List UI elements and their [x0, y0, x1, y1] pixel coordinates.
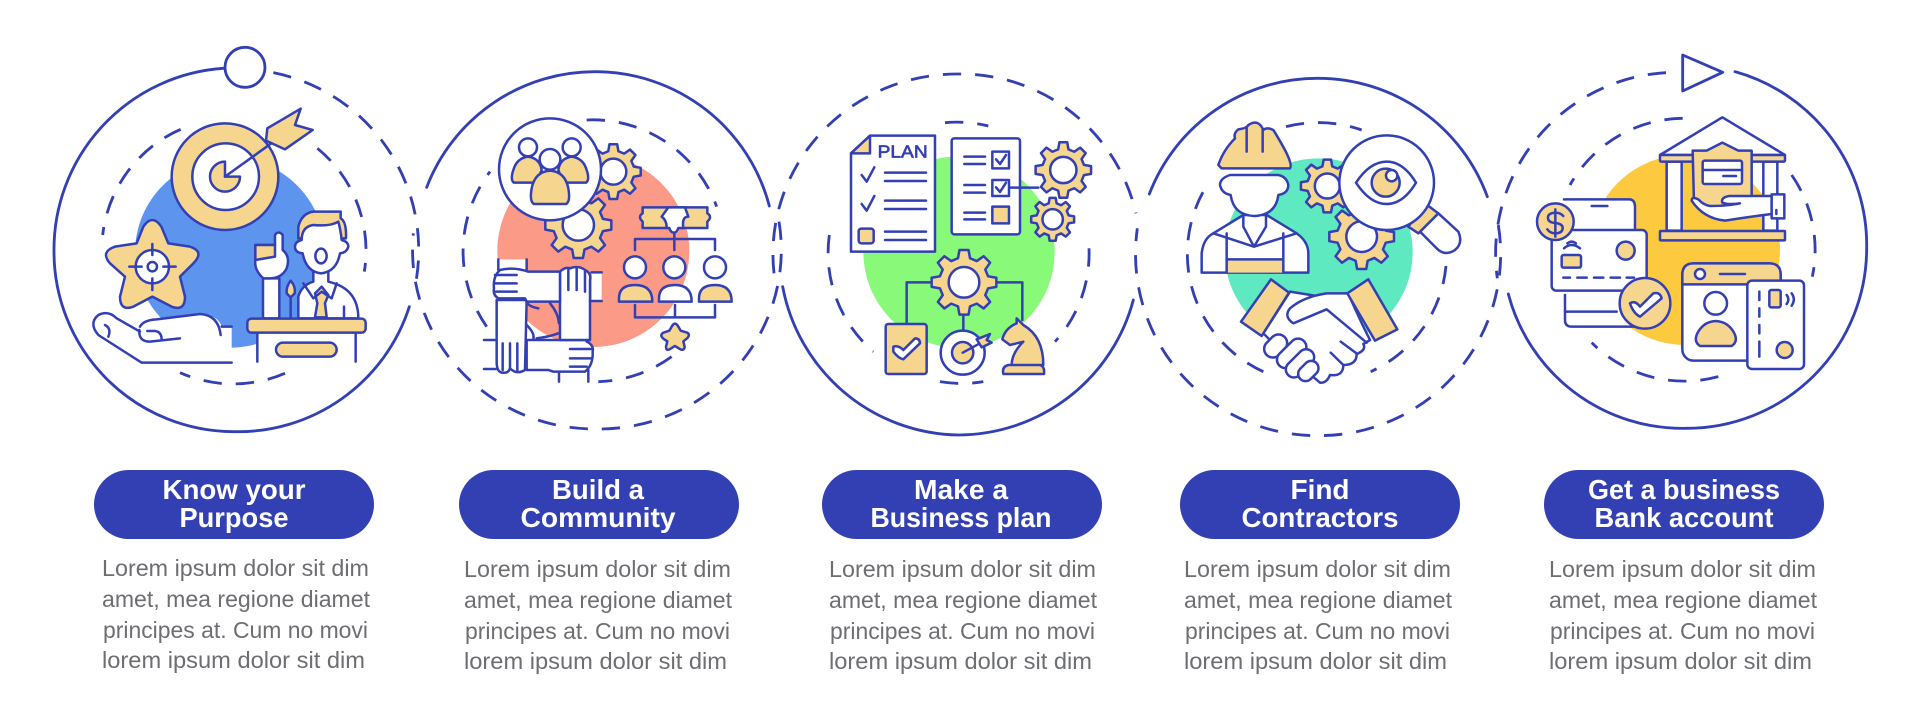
text block: column 3: lorem ipsum dolor sit dim [829, 648, 1092, 674]
heading pill: build a community: Build a [552, 474, 644, 505]
yellow background circle [1590, 155, 1780, 345]
panel: get a business bank account circle [1496, 55, 1867, 428]
text block: column 5: lorem ipsum dolor sit dim [1549, 648, 1812, 674]
panel: make a business plan circle [773, 74, 1136, 435]
icon: gears [1301, 160, 1394, 269]
icon: team in circle [499, 118, 601, 220]
icon: approval check badge [1620, 278, 1670, 329]
icon: bank building [1660, 117, 1785, 240]
text block: column 4: principes at. Cum no movi [1185, 618, 1450, 644]
teal background circle [1225, 158, 1413, 346]
heading pill: find contractors: Find [1290, 474, 1350, 505]
icon: gears [545, 144, 641, 258]
heading pill: get a business bank account: Bank account [1594, 502, 1774, 533]
text block: column 5: amet, mea regione diamet [1549, 587, 1817, 613]
text block: column 3: principes at. Cum no movi [830, 618, 1095, 644]
heading pill: get a business bank account [1544, 470, 1824, 539]
heading pill: make a business plan [822, 470, 1102, 539]
icon: small target [941, 331, 992, 375]
text block: column 2: lorem ipsum dolor sit dim [464, 648, 727, 674]
heading pill: know your purpose: Purpose [180, 502, 288, 533]
icon: start circle marker [225, 47, 265, 87]
text block: column 1: lorem ipsum dolor sit dim [102, 647, 365, 673]
icon: org chart with puzzle [619, 207, 732, 317]
text block: column 2: Lorem ipsum dolor sit dim [464, 556, 731, 582]
salmon background circle [497, 155, 689, 347]
text block: column 1: Lorem ipsum dolor sit dim [102, 555, 369, 581]
icon: plan document: PLAN [878, 141, 928, 161]
heading pill: find contractors [1180, 470, 1460, 539]
panel: build a community circle [413, 72, 781, 429]
ring: solid and dashed orbit [413, 72, 781, 429]
text block: column 3 [829, 556, 1097, 674]
icon: construction worker [1202, 123, 1308, 273]
text block: column 2: amet, mea regione diamet [464, 587, 732, 613]
text block: column 4 [1184, 556, 1452, 674]
text block: column 5: Lorem ipsum dolor sit dim [1549, 556, 1816, 582]
panel: know your purpose circle [54, 47, 419, 432]
heading pill: get a business bank account: Get a business [1588, 474, 1780, 505]
text block: column 1: principes at. Cum no movi [103, 617, 368, 643]
icon: chess knight [1002, 318, 1044, 374]
icon: connector lines and central gear [907, 250, 1022, 332]
text block: column 4: Lorem ipsum dolor sit dim [1184, 556, 1451, 582]
icon: target with arrow [172, 109, 313, 230]
blue background circle [135, 158, 325, 348]
heading pill: build a community [459, 470, 739, 539]
ring: solid and dashed orbit [1496, 72, 1867, 428]
icon: handshake [1241, 279, 1397, 384]
icon: identity profile window [1682, 263, 1781, 361]
heading pill: find contractors: Contractors [1242, 502, 1398, 533]
text block: column 3: Lorem ipsum dolor sit dim [829, 556, 1096, 582]
green background circle [863, 156, 1055, 348]
text block: column 5 [1549, 556, 1817, 674]
icon: star with crosshair [106, 220, 198, 308]
icon: speaker at podium [247, 212, 366, 362]
ring: solid and dashed orbit [54, 68, 419, 432]
heading pill: make a business plan: Business plan [870, 502, 1052, 533]
panel: find contractors circle [1136, 78, 1501, 436]
text block: column 5: principes at. Cum no movi [1550, 618, 1815, 644]
icon: end triangle marker [1683, 55, 1723, 91]
heading pill: know your purpose [94, 470, 374, 539]
heading pill: build a community: Community [520, 502, 676, 533]
icon: bank cards with dollar coin [1537, 199, 1647, 327]
ring: solid and dashed orbit [1136, 78, 1501, 436]
icon: contactless card [1747, 281, 1804, 369]
ring: solid and dashed orbit [773, 74, 1136, 435]
icon: approved document [886, 324, 927, 374]
text block: column 4: amet, mea regione diamet [1184, 587, 1452, 613]
heading pill: know your purpose: Know your [162, 474, 306, 505]
icon: open hand [93, 313, 232, 363]
icon: plan document [851, 136, 935, 252]
text block: column 4: lorem ipsum dolor sit dim [1184, 648, 1447, 674]
text block: column 1 [102, 555, 370, 673]
text block: column 1: amet, mea regione diamet [102, 586, 370, 612]
icon: four interlocked hands [484, 259, 602, 382]
icon: checklist [952, 138, 1038, 234]
text block: column 2: principes at. Cum no movi [465, 618, 730, 644]
icon: magnifier with eye [1339, 135, 1460, 253]
icon: small star [661, 324, 689, 350]
text block: column 2 [464, 556, 732, 674]
icon: small gears [1031, 142, 1091, 241]
text block: column 3: amet, mea regione diamet [829, 587, 1097, 613]
heading pill: make a business plan: Make a [914, 474, 1008, 505]
